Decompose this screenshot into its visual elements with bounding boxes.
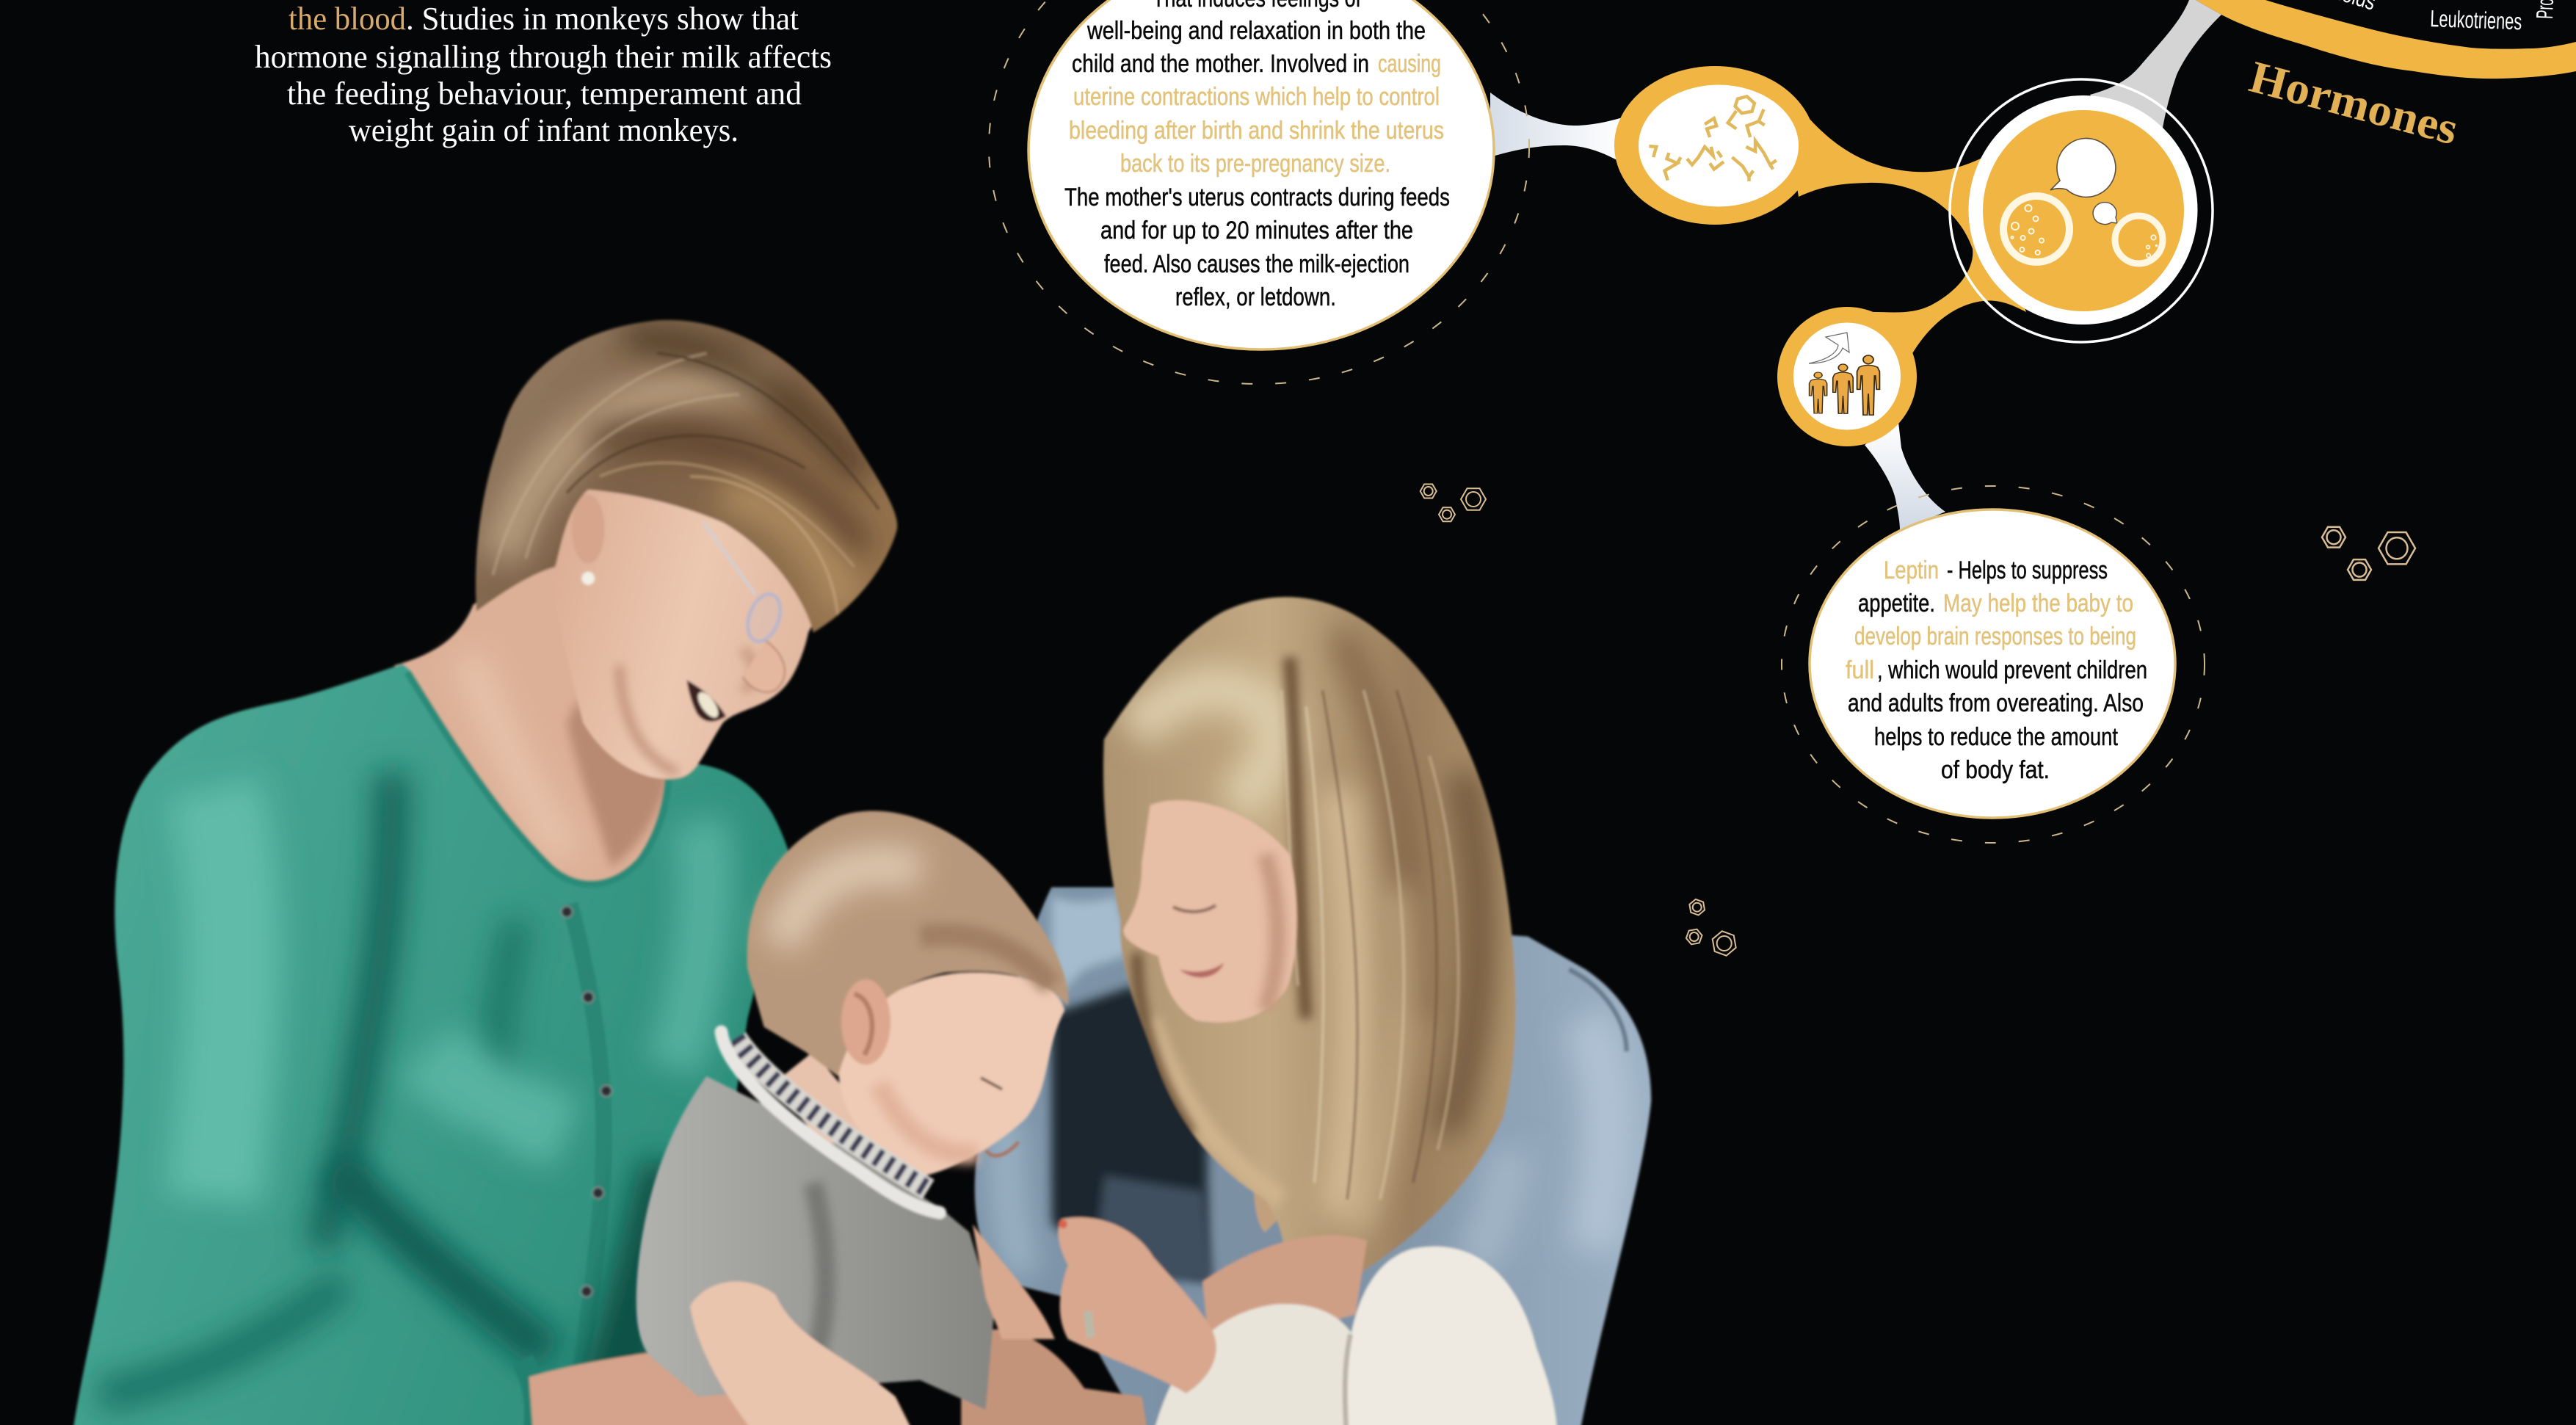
neck: [772, 1051, 896, 1150]
icon: small speech bubble: [2093, 203, 2117, 225]
text: leptin description: - Helps to suppress: [1947, 556, 2108, 584]
intro text block: weight gain of infant monkeys.: [349, 112, 739, 148]
hub circle: cells communicating: [1950, 79, 2213, 342]
text: oxytocin description: uterine contractions which help to control: [1073, 83, 1440, 111]
icon: large speech bubble: [2050, 138, 2116, 197]
text: oxytocin description: child and the mother. Involved in: [1072, 50, 1369, 78]
heading: Hormones: Hormones: [2244, 52, 2463, 155]
denim jacket: [975, 888, 1651, 1425]
older woman's hand: [529, 1347, 772, 1425]
text: leptin description: Leptin: [1884, 556, 1939, 584]
baby's arm: [690, 1282, 920, 1425]
gold connectors and nodes: [1614, 66, 2026, 446]
older woman: [70, 320, 897, 1425]
node: growth: [1777, 307, 1917, 446]
photo: grandmother, mother and baby: [70, 320, 1651, 1425]
icon: hexagon cluster right: [2322, 527, 2415, 580]
text: leptin description: appetite.: [1858, 590, 1935, 617]
text: leptin description: of body fat.: [1941, 756, 2050, 784]
intro text block: the feeding behaviour, temperament and: [287, 76, 802, 112]
other adult's hand: [961, 1330, 1150, 1425]
icon: three growing figures: [1809, 355, 1879, 415]
text: oxytocin description: reflex, or letdown.: [1175, 283, 1336, 311]
link: hub to arc: [2090, 0, 2221, 147]
text: oxytocin description: The mother's uterus contracts during feeds: [1064, 184, 1450, 211]
striped collar: [721, 1031, 940, 1213]
text: oxytocin description: and for up to 20 minutes after the: [1100, 217, 1413, 244]
text: leptin description: May help the baby to: [1943, 590, 2133, 617]
long blond hair: [1103, 597, 1516, 1301]
text: leptin description: full: [1846, 656, 1874, 684]
text: leptin description: [1846, 556, 2147, 784]
grey shirt: [636, 1076, 994, 1410]
link: oxytocin to molecule node: [1490, 93, 1622, 163]
text: leptin description: and adults from overeating. Also: [1848, 689, 2144, 717]
face: [551, 468, 821, 779]
icon: hexagon cluster lower: [1685, 898, 1740, 958]
arc: hormones ring: [2196, 0, 2576, 79]
face: [1123, 800, 1297, 1023]
text: leptin description: helps to reduce the amount: [1874, 723, 2118, 751]
text: oxytocin description: back to its pre-pregnancy size.: [1120, 150, 1390, 178]
head: [747, 811, 1068, 1176]
baby: [636, 811, 1150, 1425]
node: molecule: [1614, 66, 1815, 225]
text: oxytocin description: well-being and relaxation in both the: [1086, 17, 1426, 45]
text: oxytocin description: [1064, 0, 1450, 311]
younger woman: [975, 597, 1651, 1425]
short hair: [476, 320, 897, 633]
necklace and chest: [1249, 1134, 1290, 1232]
buttons: [562, 906, 612, 1297]
icon: small cell: [2115, 216, 2163, 264]
icon: hexagon cluster centre: [1421, 485, 1486, 521]
link: leptin to growth node: [1865, 422, 1945, 531]
text: leptin description: , which would prevent children: [1877, 656, 2147, 684]
text: leptin description: develop brain responses to being: [1854, 623, 2136, 650]
bent arm: [1202, 1236, 1367, 1339]
icon: rising arrow: [1809, 333, 1849, 363]
intro text block: the blood: [289, 1, 406, 37]
intro text block: . Studies in monkeys show that: [406, 1, 799, 37]
cardigan: [70, 664, 794, 1425]
text: oxytocin description: feed. Also causes the milk-ejection: [1104, 250, 1409, 278]
panel: oxytocin: [989, 0, 1529, 384]
text: oxytocin description: causing: [1378, 50, 1441, 78]
arc labels: Leukotrienes: [2430, 5, 2522, 35]
icon: large cell: [2003, 196, 2069, 262]
text: oxytocin description: bleeding after birth and shrink the uterus: [1069, 117, 1444, 145]
arc labels: [2266, 0, 2561, 35]
hand with ring: [1059, 1217, 1216, 1393]
baby's right arm: [973, 1224, 1055, 1339]
icon: molecule: [1649, 96, 1777, 181]
panel: leptin: [1782, 486, 2205, 843]
intro text block: hormone signalling through their milk affects: [255, 39, 832, 75]
white trousers: [1150, 1247, 1558, 1425]
intro text block: [255, 1, 832, 148]
neck and chest: [394, 543, 682, 896]
